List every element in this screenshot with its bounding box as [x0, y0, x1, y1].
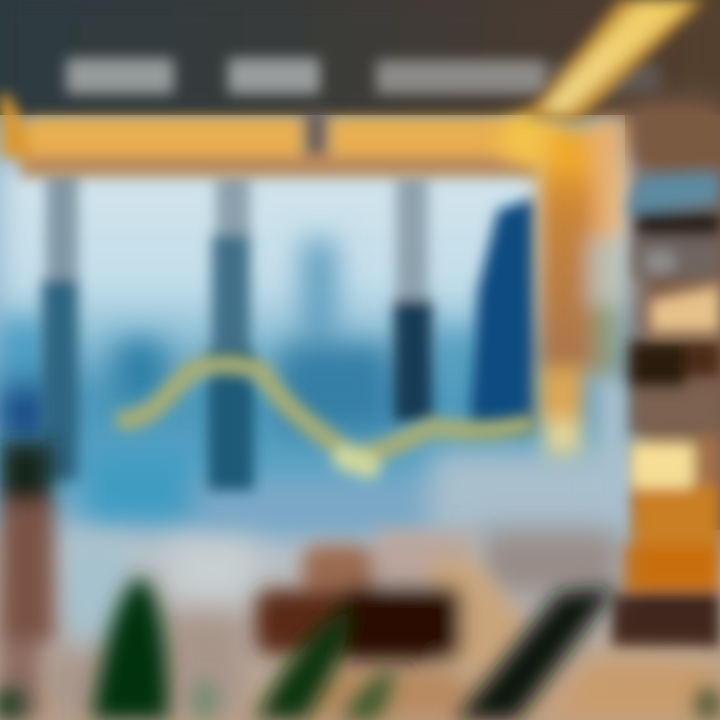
column middle lower — [208, 350, 254, 490]
large plant leaf — [92, 578, 168, 720]
lower water band — [85, 452, 195, 522]
window columns — [42, 170, 432, 490]
central plant leaf — [256, 605, 352, 720]
lower left wall — [0, 640, 40, 720]
brown shelf — [632, 388, 720, 434]
sign word three — [376, 60, 546, 94]
skyline block right — [435, 330, 475, 400]
teal panel — [626, 172, 720, 215]
window panorama — [0, 160, 640, 535]
beam right section — [330, 117, 534, 156]
junction glow — [499, 114, 571, 166]
ceiling — [0, 0, 720, 115]
warm floor centre — [300, 665, 470, 720]
right corner leaf — [696, 688, 720, 720]
grey shelf — [634, 238, 720, 278]
dark blue left block — [0, 382, 50, 442]
skyline haze left — [0, 320, 45, 390]
sign word one — [66, 58, 174, 94]
blue tower right — [470, 198, 535, 430]
dark shelf left — [630, 342, 685, 388]
sign word two — [228, 58, 320, 94]
plants — [0, 578, 720, 720]
sofa tan side — [430, 560, 528, 680]
dark diagonal stem — [456, 588, 616, 720]
beam far left end — [0, 92, 32, 160]
top right wood — [640, 110, 720, 165]
grey brown floor — [165, 605, 245, 720]
dark lower block — [612, 592, 720, 648]
column right upper — [396, 175, 428, 300]
brown planter — [0, 502, 54, 642]
sofa pale top — [375, 530, 475, 585]
orange band — [622, 546, 720, 590]
dark shelf — [636, 212, 720, 236]
lower floor — [45, 530, 720, 720]
bright shelf — [650, 285, 720, 332]
right shelving — [612, 110, 720, 648]
diagonal ceiling light — [525, 0, 705, 122]
dark plant top — [0, 442, 52, 502]
skyline — [0, 240, 630, 540]
column middle mid — [212, 235, 250, 350]
left corner leaf — [0, 688, 26, 720]
line chart overlay — [125, 364, 525, 466]
column frame — [590, 118, 628, 240]
beam left section — [28, 117, 302, 156]
lamp — [630, 442, 694, 488]
sofa body left — [256, 590, 346, 654]
light core — [542, 0, 692, 110]
column base bright — [538, 368, 584, 428]
warm floor right — [540, 655, 720, 720]
grey brown lower left — [45, 650, 105, 720]
sofa upper — [302, 545, 374, 593]
lower pale band — [195, 480, 435, 535]
trend line — [125, 364, 525, 455]
orange corner column — [499, 114, 630, 543]
distant tower — [302, 240, 336, 340]
column right lower — [394, 300, 432, 422]
column top bright — [548, 128, 592, 173]
floor — [0, 530, 720, 720]
small lower leaf — [193, 680, 217, 720]
grey shelf highlight — [644, 250, 676, 274]
sofa body right — [340, 586, 462, 660]
sofa — [256, 530, 528, 680]
orange block — [632, 486, 720, 546]
column body — [538, 160, 594, 370]
column left lower — [42, 280, 78, 480]
beam centre gap — [304, 112, 328, 154]
small plant leaf — [340, 664, 394, 720]
pale grey floor — [170, 540, 254, 605]
dark shelf right — [685, 342, 720, 376]
skyline block between columns — [115, 340, 165, 400]
green strip — [592, 305, 618, 380]
blurred ceiling sign — [66, 58, 660, 94]
beam underside — [20, 153, 540, 177]
sign word faint tail — [550, 64, 660, 92]
column left upper — [46, 170, 78, 280]
column middle upper — [216, 175, 250, 235]
skyline mid block — [280, 345, 390, 430]
light glow — [525, 0, 705, 122]
pale strip — [588, 238, 620, 308]
blue strip — [596, 378, 630, 543]
right pale glass — [430, 450, 630, 540]
pale blue left floor — [62, 540, 130, 640]
trend line low highlight — [345, 458, 368, 466]
right wall — [625, 100, 720, 550]
column base pale — [544, 420, 582, 456]
warm block — [695, 436, 720, 486]
grey mid floor — [480, 530, 620, 595]
left foreground — [0, 442, 54, 720]
golden ceiling beam — [0, 92, 540, 177]
